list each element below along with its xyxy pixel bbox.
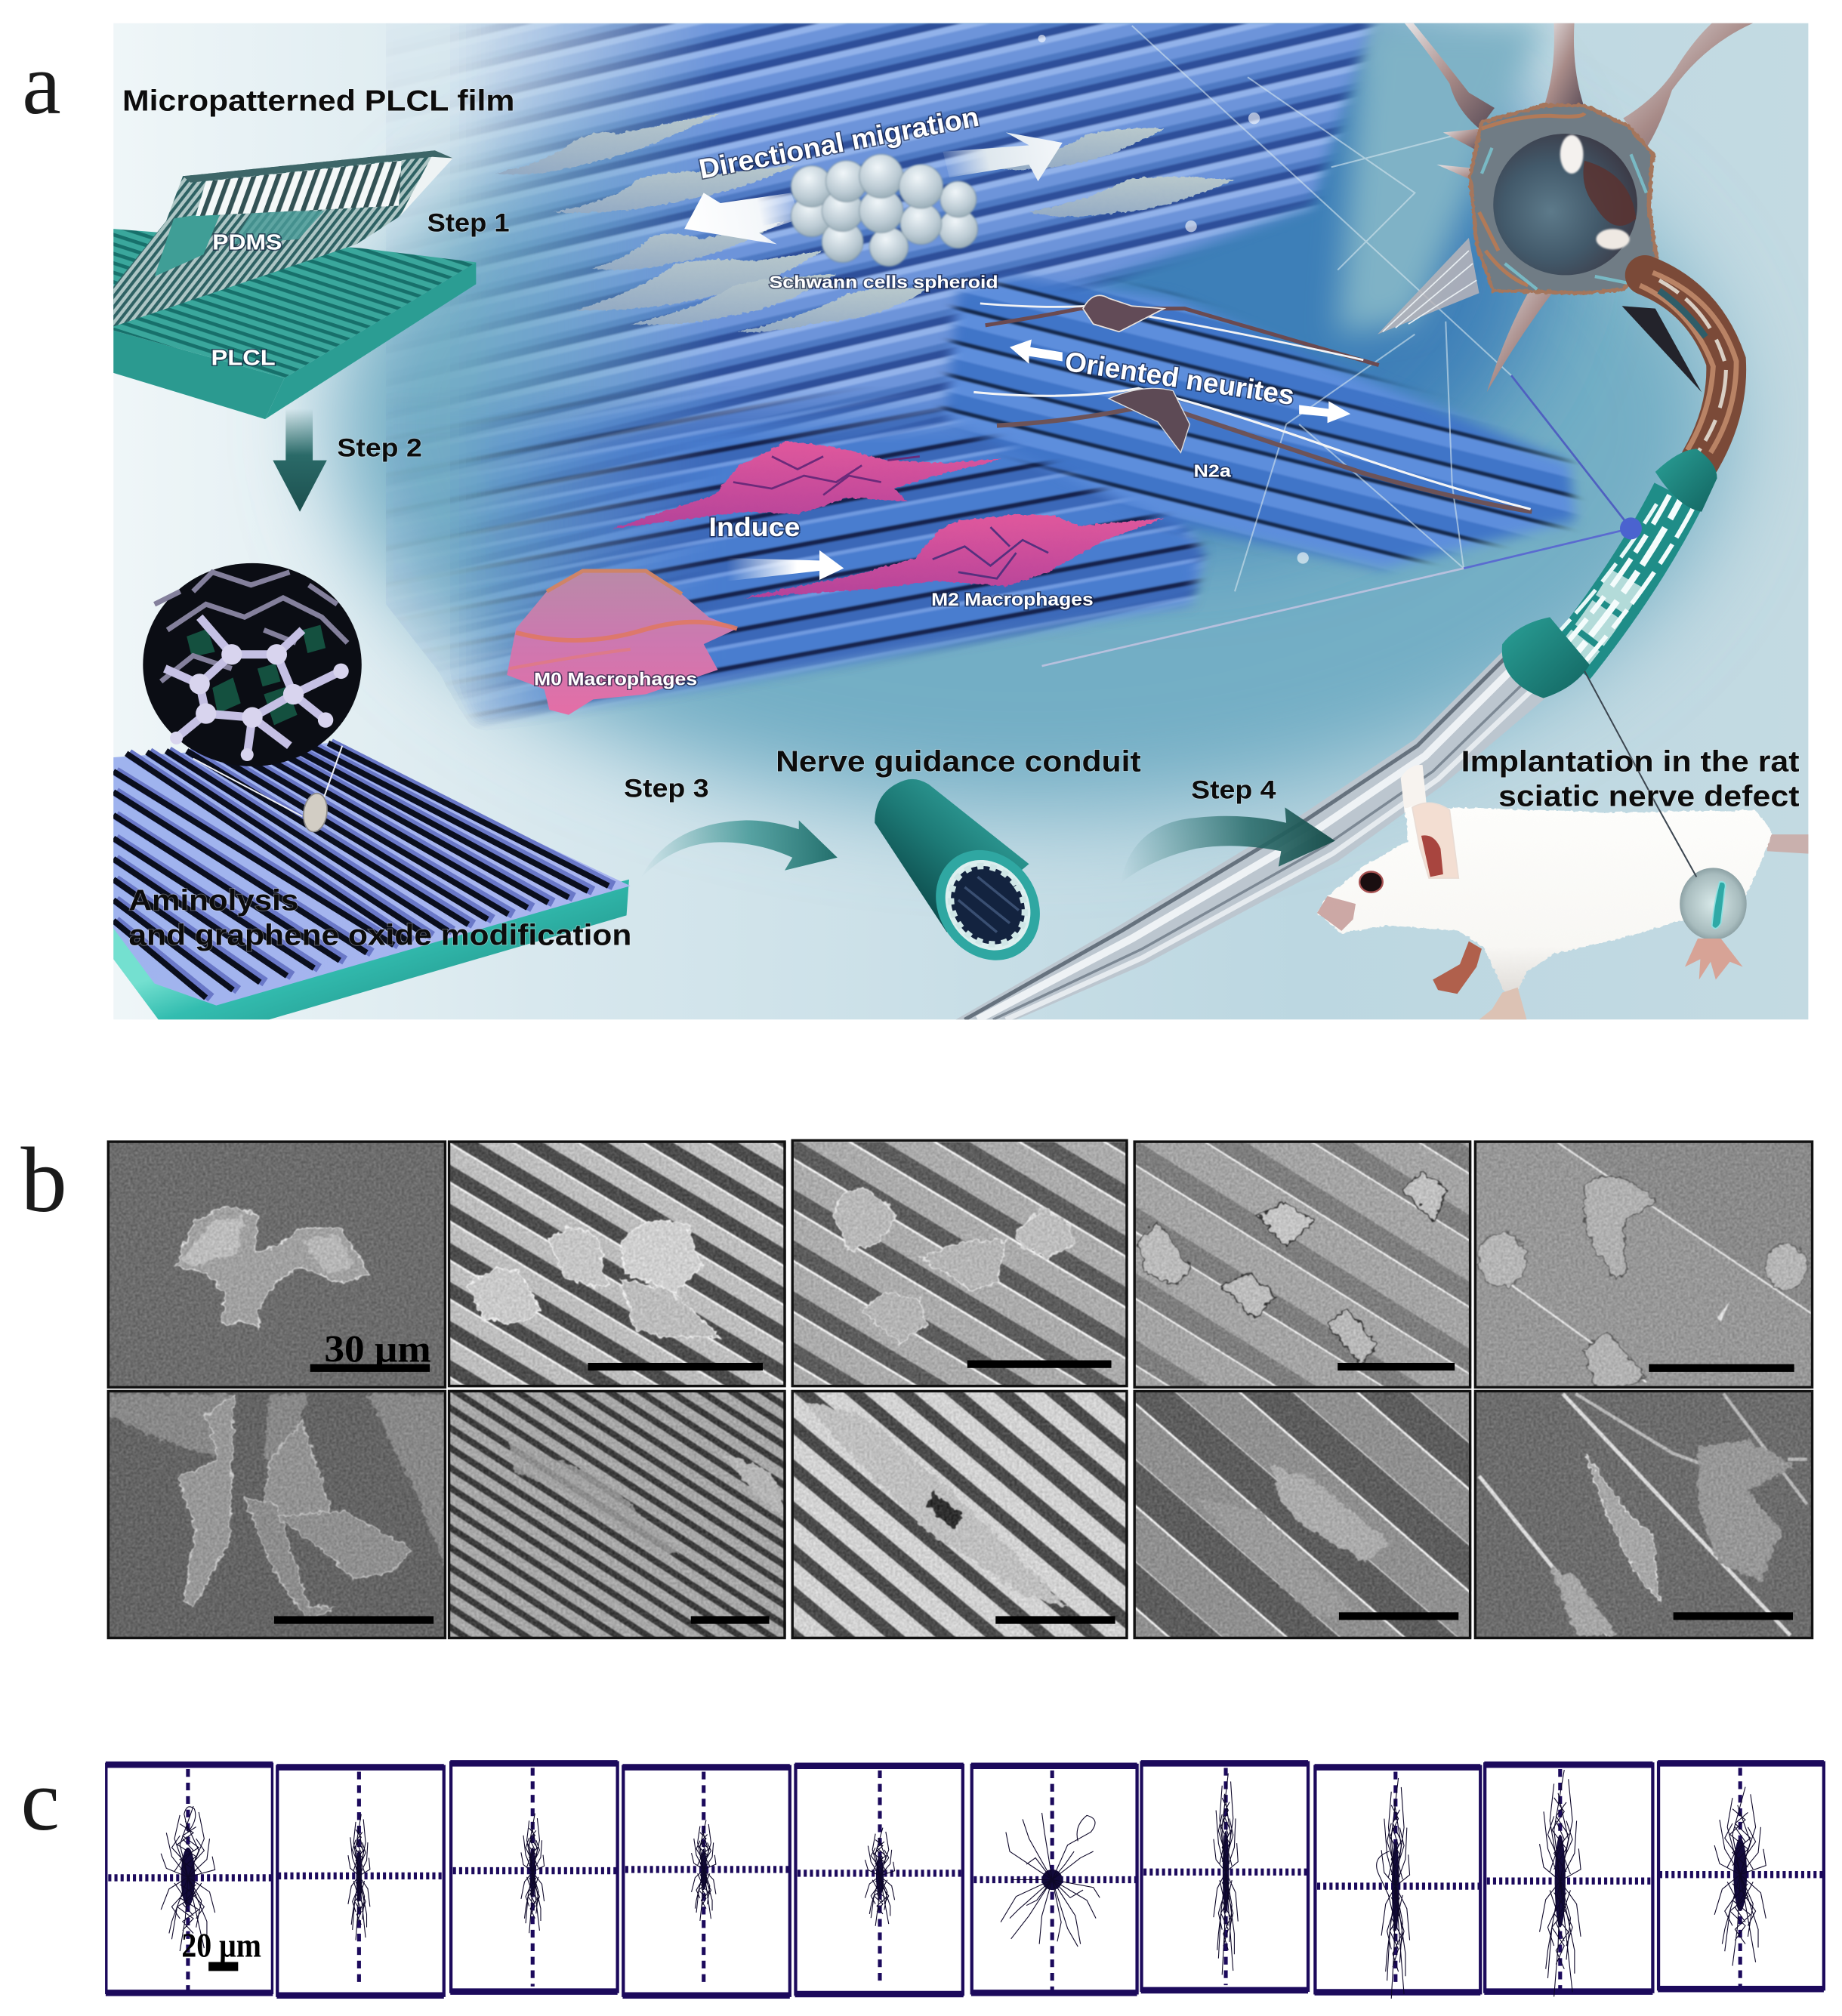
nerve stump [955, 649, 1550, 1019]
SEM row 2 col 5 [1475, 1391, 1813, 1638]
arrow: induce [727, 550, 844, 581]
panel c: migration trajectory plots [106, 1763, 1824, 1999]
trajectory plot 2 [276, 1767, 444, 1996]
implant capsule [1712, 882, 1726, 929]
SEM row 1 col 1 [108, 1142, 445, 1387]
heading: Directional migration: Directional migration [696, 101, 981, 185]
label: Induce: Induce [709, 513, 800, 542]
arrow: migration right [943, 132, 1063, 181]
stripes: neuron substrate [936, 270, 1583, 574]
conduit sleeve: upper [1655, 449, 1717, 512]
ear [1412, 803, 1458, 878]
label: c: c [21, 1752, 60, 1849]
label: Micropatterned PLCL film: Micropatterned PLCL film [122, 85, 514, 117]
tail [1767, 834, 1810, 854]
trajectory plot 8 [1315, 1767, 1480, 1999]
film: graphene oxide modified [113, 743, 631, 1019]
panel b: SEM micrographs [108, 1140, 1813, 1638]
SEM row 1 col 5 [1475, 1142, 1813, 1387]
blue connector lines [1042, 375, 1631, 666]
SEM row 2 col 3 [792, 1391, 1128, 1638]
macrophage M2 upper [612, 441, 1002, 529]
nerve fibers in conduit [1551, 495, 1695, 668]
label: 30 um: 30 μm [324, 1327, 431, 1370]
arrow: neurites left [1010, 340, 1063, 364]
conduit sleeve: lower [1502, 617, 1590, 698]
stripes: upper substrate [388, 23, 1379, 725]
whisker pad [1317, 896, 1356, 931]
SEM row 1 col 4 [1134, 1142, 1471, 1387]
film: micropatterned PLCL [113, 229, 476, 419]
inset pointer [193, 746, 342, 834]
dendrites [1378, 23, 1753, 392]
arrow: step 3 [640, 820, 838, 878]
label: 20 um: 20 μm [181, 1926, 261, 1965]
soma outer [1470, 106, 1657, 293]
arrow: step 2 [273, 408, 327, 512]
SEM row 2 col 4 [1134, 1391, 1471, 1638]
label: Aminolysis and graphene oxide modification: Aminolysis [129, 885, 298, 917]
trajectory plot 3 [450, 1763, 618, 1992]
trajectory plot 10 [1658, 1763, 1824, 1989]
scale bars [274, 1361, 1794, 1624]
label: Step 2: Step 2 [337, 433, 422, 462]
trajectory plot 1 [106, 1764, 273, 1993]
hind foot [1685, 939, 1743, 980]
implant pointer [1584, 671, 1696, 877]
trajectory plot 7 [1141, 1763, 1308, 1990]
stripes: macrophage substrate [386, 390, 1207, 724]
panel a background [113, 0, 1808, 1019]
arrow: neurites right [1299, 401, 1350, 423]
network lines [1038, 26, 1531, 591]
SEM frame lines [108, 1140, 1813, 1638]
back ear [1401, 765, 1427, 812]
label: Step 1: Step 1 [427, 209, 510, 238]
rat [1317, 671, 1810, 1019]
neurons N2a [973, 295, 1532, 512]
soma highlights [1479, 113, 1646, 289]
macrophage M0 [507, 571, 737, 715]
soma nucleus [1493, 134, 1637, 275]
heading: Oriented neurites: Oriented neurites [1063, 346, 1297, 411]
SEM row 1 col 2 [449, 1142, 786, 1387]
label: sciatic nerve defect: sciatic nerve defect [1498, 781, 1800, 813]
label: N2a: N2a [1193, 461, 1231, 481]
Schwann cell spheroid [791, 154, 977, 266]
label: Nerve guidance conduit: Nerve guidance conduit [776, 746, 1141, 778]
label: Schwann cells spheroid: Schwann cells spheroid [770, 272, 998, 291]
label: Aminolysis and graphene oxide modification: and graphene oxide modification [129, 920, 631, 952]
label: a: a [22, 36, 61, 133]
trajectory plot 5 [795, 1765, 964, 1994]
arrow: step 4 [1120, 807, 1335, 883]
connector dot [1620, 517, 1642, 539]
panel a: conduit fabrication schematic [113, 0, 1810, 1019]
SEM row 2 col 2 [449, 1391, 786, 1638]
inset: graphene oxide lattice [143, 563, 362, 766]
trajectory plot 4 [622, 1767, 790, 1996]
arrow: migration left [684, 193, 800, 245]
trajectory plot 6 [971, 1765, 1137, 1993]
label: M2 Macrophages: M2 Macrophages [931, 590, 1094, 610]
neuron [1378, 23, 1753, 461]
label: M0 Macrophages: M0 Macrophages [534, 670, 697, 690]
label: Implantation in the rat: Implantation in the rat [1461, 746, 1800, 778]
eye [1359, 872, 1383, 892]
scale bar: 20 um [208, 1962, 238, 1971]
SEM row 2 col 1 [108, 1391, 445, 1638]
sphere inset [1680, 868, 1747, 940]
Schwann cells [495, 113, 1235, 332]
macrophage M2 lower [742, 514, 1164, 598]
nerve guidance conduit icon [875, 779, 1061, 981]
label: Aminolysis and graphene oxide modification [129, 885, 631, 952]
film: peeling PDMS [113, 150, 453, 327]
body [1317, 807, 1773, 993]
trajectory plot 9 [1484, 1764, 1652, 1996]
label: Step 3: Step 3 [624, 775, 709, 803]
label: b: b [21, 1129, 67, 1231]
front legs [1433, 941, 1482, 994]
label: PDMS: PDMS [212, 230, 282, 254]
label: PLCL: PLCL [211, 347, 276, 371]
SEM row 1 col 3 [792, 1142, 1128, 1387]
label: Step 4: Step 4 [1191, 775, 1276, 804]
fan streaks [1383, 251, 1476, 331]
axon [1645, 275, 1726, 461]
